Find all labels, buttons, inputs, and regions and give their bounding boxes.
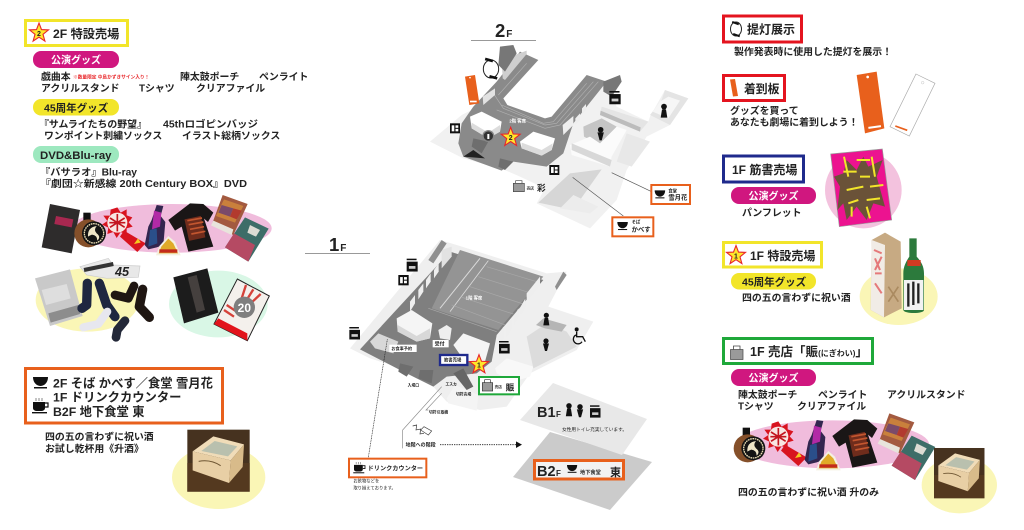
callout: drink counter: ドリンクカウンター: [368, 465, 423, 473]
callout: soba Kabesu: そば: [632, 218, 641, 225]
map label: seats: 1階 客席: [466, 294, 483, 301]
goods photos: 2F special shop: [35, 195, 272, 341]
text: arrival board note: [730, 104, 858, 128]
panel: 1F program counter: [724, 149, 902, 228]
pill: DVD and Blu-ray: DVD&Blu-ray: [40, 150, 112, 162]
photo: wooden sake cup: [172, 430, 265, 509]
heading: 1F program counter: 1F 筋書売場: [732, 162, 797, 177]
floor plan: B2F: [513, 432, 652, 510]
heading: 1F shop Nigiwai: [724, 338, 872, 364]
goods list: performance goods: クリアファイル: [196, 82, 265, 94]
pill: 45th anniversary goods: 45周年グッズ: [742, 276, 807, 288]
icon: elevators and info: [450, 92, 621, 175]
callout: shop Nigiwai: 売店: [495, 384, 502, 389]
text: trial sake: [45, 430, 154, 455]
marker: star 2: 2: [509, 135, 513, 142]
goods list: shop: 陣太鼓ポーチ: [738, 388, 797, 401]
pill: DVD and Blu-ray: [33, 146, 119, 163]
goods photos: 2F special shop: 45: [114, 265, 130, 279]
marker: star 2: [501, 127, 520, 145]
panel: 1F special shop: [724, 233, 938, 325]
heading: 2F: 2F: [495, 20, 512, 41]
icon: shop Aya: [513, 181, 546, 193]
heading: 1F special shop: 1F 特設売場: [750, 248, 815, 263]
callout: cafeteria Setsugetsuka: [651, 185, 690, 204]
callout: drink counter: [349, 459, 426, 477]
heading box: food and drink: [26, 368, 222, 423]
pill: 45th anniversary goods: [33, 99, 119, 116]
photo: pamphlet: [825, 149, 902, 228]
goods list: 45th anniversary goods: [39, 118, 280, 142]
text: arrival board note: あなたも劇場に着到しよう！: [730, 116, 858, 128]
map labels: entrance and ticket area: 切符売場: [456, 391, 471, 396]
floor map: 1F: [305, 234, 593, 492]
heading box: food and drink: B2F 地下食堂 東: [53, 404, 145, 419]
text: drink counter note: [353, 478, 396, 492]
map labels: entrance and ticket area: エスカ: [445, 382, 457, 387]
goods list: performance goods: ペンライト: [259, 71, 308, 83]
marker: star 1: [469, 355, 488, 373]
text: trial sake: お試し乾杯用《升酒》: [45, 442, 144, 455]
goods list: performance goods: 陣太鼓ポーチ: [180, 70, 239, 83]
callout: cafeteria Setsugetsuka: 雪月花: [668, 193, 688, 202]
goods list: 45th anniversary goods: 『サムライたちの野望』: [39, 118, 147, 130]
heading: lantern display: [724, 16, 802, 42]
goods list: performance goods: ※数量限定 中島かずきサイン入り！: [73, 74, 149, 80]
icon: lantern: [483, 58, 499, 80]
goods list: performance goods: Tシャツ: [139, 84, 175, 94]
pill: performance goods: 公演グッズ: [748, 190, 798, 202]
goods photos: shop: [734, 413, 935, 480]
heading: arrival board: 着到板: [744, 82, 780, 96]
illustration: orange and white boards: [857, 72, 935, 136]
callout: shop Nigiwai: 賑: [506, 383, 515, 393]
panel: restaurants: [26, 368, 265, 509]
pill: performance goods: [33, 51, 119, 68]
callout: cafeteria Setsugetsuka: 食堂: [668, 187, 678, 194]
heading: 1F program counter: [724, 156, 804, 182]
heading: 2F special shop: [26, 20, 128, 46]
text: arrival board note: グッズを買って: [730, 104, 799, 117]
icon: shop Aya: 彩: [537, 182, 546, 193]
callout: soba Kabesu: [612, 217, 653, 236]
panel: 1F shop Nigiwai: [724, 338, 997, 513]
goods list: performance goods: アクリルスタンド: [41, 82, 120, 94]
heading: arrival board: [724, 76, 784, 100]
map: 2F plan: [430, 45, 690, 236]
goods list: performance goods: 戯曲本: [41, 70, 71, 83]
heading: lantern display: 提灯展示: [747, 22, 795, 36]
goods list: 45th anniversary goods: 45thロゴピンバッジ: [163, 118, 258, 130]
map label: reception: 受付: [435, 341, 445, 348]
callout: shop Nigiwai: [479, 377, 519, 394]
heading: 1F: 1F: [329, 234, 346, 255]
map label: meal reservations: お食事予約: [391, 345, 412, 351]
goods photos: 2F special shop: 20: [238, 301, 251, 315]
panel: arrival board: [724, 72, 935, 136]
goods list: 45th anniversary goods: ワンポイント刺繍ソックス: [44, 129, 162, 142]
map: 1F plan: [349, 240, 593, 492]
goods list: DVD and Blu-ray: 『劇団☆新感線 20th Century BOX』DVD: [40, 177, 247, 190]
icon: restrooms: [597, 104, 667, 140]
icons: B1F facilities: [566, 403, 600, 418]
map label: reception: [433, 340, 449, 348]
floor map: 2F: [430, 20, 690, 236]
goods list: 45th anniversary goods: イラスト総柄ソックス: [182, 129, 280, 142]
goods list: shop: Tシャツ: [738, 402, 774, 412]
callout: program counter: [440, 355, 467, 365]
icon: shop Aya: 売店: [527, 185, 534, 190]
map labels: entrance and ticket area: [408, 382, 471, 415]
heading: 2F special shop: 2: [37, 31, 41, 38]
map label: seats: 2階 客席: [509, 118, 527, 125]
text: lantern note: 製作発表時に使用した提灯を展示！: [734, 45, 892, 58]
label: stairs to basement: 地階への階段: [406, 442, 436, 449]
heading: 1F special shop: 1: [734, 254, 738, 260]
goods list: shop: アクリルスタンド: [887, 389, 966, 401]
heading box: food and drink: 1F ドリンクカウンター: [53, 390, 181, 404]
goods list: shop: クリアファイル: [797, 400, 866, 412]
icons: vending and elevators: [349, 259, 510, 353]
photo: sake box and bottle: [860, 233, 938, 325]
text: trial sake: 四の五の言わずに祝い酒: [45, 430, 154, 443]
callout: basement cafeteria: 東: [610, 465, 621, 479]
map labels: entrance and ticket area: 切符引取機: [429, 410, 448, 415]
heading: B1F: B1F: [537, 405, 561, 421]
heading: 1F special shop: [724, 242, 822, 267]
icons: restrooms and accessible toilet: [543, 313, 585, 351]
goods list: DVD and Blu-ray: 『バサラオ』Blu-ray: [40, 166, 138, 178]
goods list: shop: ペンライト: [818, 389, 867, 401]
panel: lantern display: [724, 16, 892, 58]
heading: 2F: [471, 20, 536, 41]
map label: meal reservations: [389, 345, 417, 352]
pill: 45th anniversary goods: [731, 273, 816, 290]
pill: performance goods: [731, 369, 816, 386]
text: pamphlet: パンフレット: [742, 207, 801, 219]
panel: 2F special shop: [26, 20, 308, 341]
pill: performance goods: [731, 187, 816, 204]
callout: soba Kabesu: かべす: [632, 226, 651, 234]
callout: program counter: 筋書売場: [444, 357, 462, 364]
pill: performance goods: 公演グッズ: [748, 372, 798, 384]
pill: 45th anniversary goods: 45周年グッズ: [44, 102, 109, 114]
arrow: to basement: [440, 441, 522, 448]
icon: stairs down: [413, 425, 432, 435]
pill: performance goods: 公演グッズ: [51, 54, 101, 66]
goods list: performance goods: [41, 70, 308, 94]
callout: basement cafeteria: B2F: [537, 464, 561, 480]
text: sake cup only: 四の五の言わずに祝い酒 升のみ: [738, 486, 879, 498]
text: celebration sake: 四の五の言わずに祝い酒: [742, 291, 851, 304]
heading: 2F special shop: 2F 特設売場: [53, 26, 119, 41]
text: women's restrooms: 女性用トイレ充実しています。: [562, 426, 627, 433]
text: drink counter note: お飲物などを: [353, 478, 379, 485]
heading: 1F: [305, 234, 370, 255]
goods list: shop: [738, 388, 966, 412]
callout: basement cafeteria: 地下食堂: [580, 468, 601, 476]
icon: arrival board: [465, 75, 479, 105]
text: drink counter note: 取り揃えております。: [353, 485, 396, 492]
map labels: entrance and ticket area: 入場口: [408, 382, 419, 387]
photo: wooden sake cup: [922, 448, 997, 513]
heading: 1F shop Nigiwai: 1F 売店「賑(にぎわい)」: [750, 344, 868, 359]
marker: star 1: 1: [477, 362, 481, 369]
callout: basement cafeteria: [534, 460, 624, 480]
goods list: DVD and Blu-ray: [40, 166, 247, 190]
heading box: food and drink: 2F そば かべす／食堂 雪月花: [53, 376, 213, 390]
floor plan: B1F: [520, 383, 647, 455]
